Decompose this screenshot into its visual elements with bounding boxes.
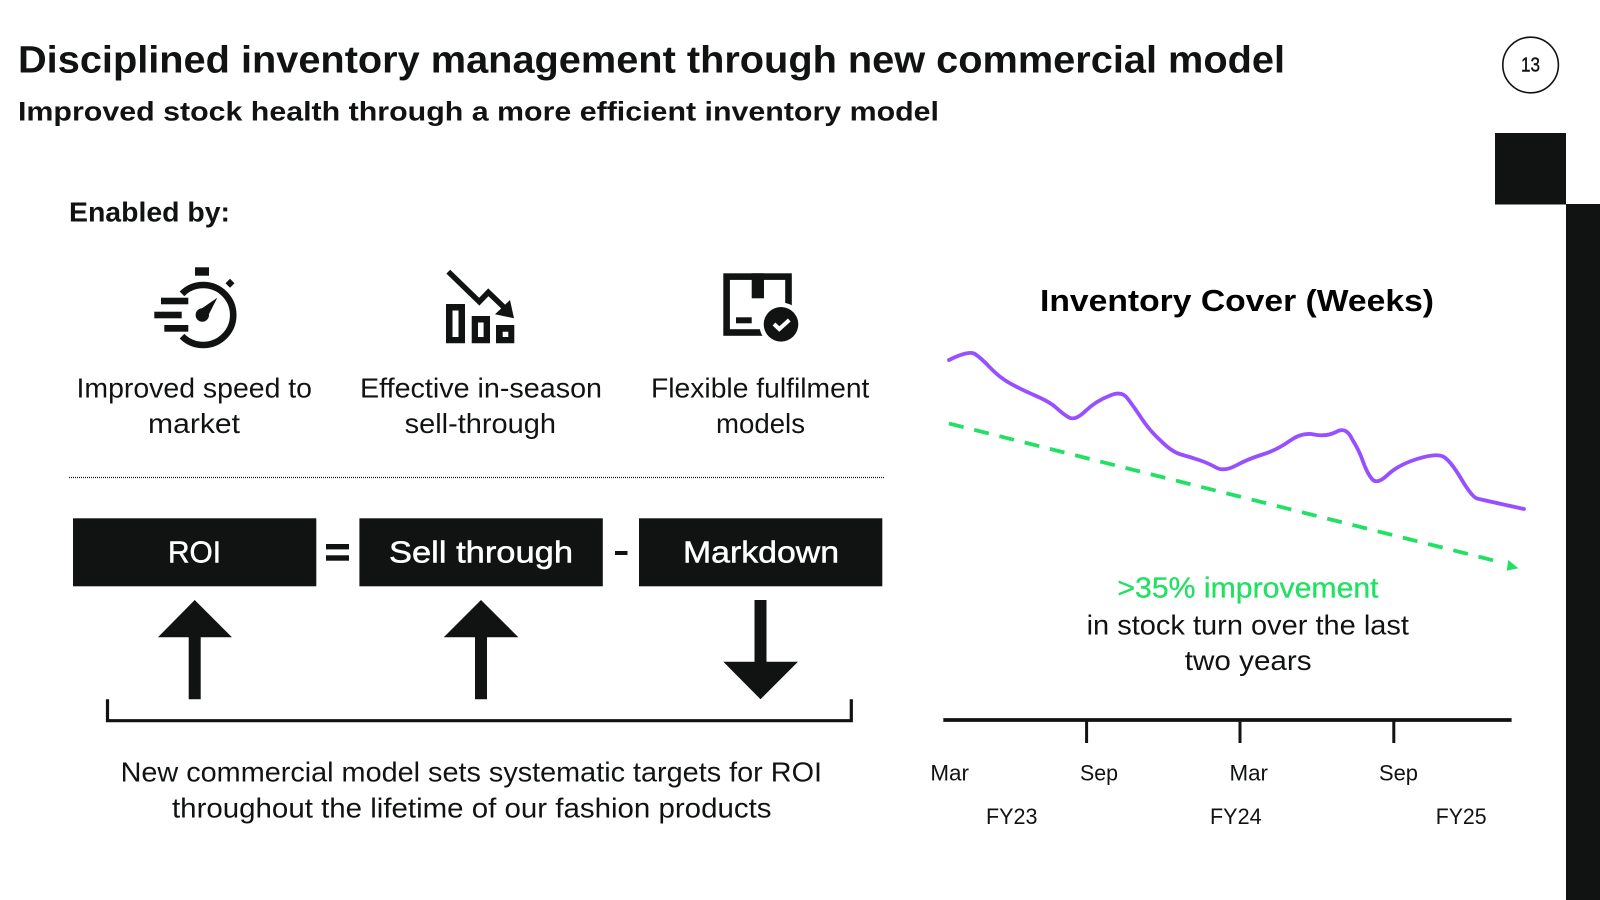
timeline axis (943, 720, 1512, 743)
equals sign (326, 544, 349, 561)
brand block: square and side bar (1495, 133, 1600, 900)
subtitle: Improved stock health through a more efficient inventory model (18, 97, 939, 127)
axis month labels: Sep (1080, 761, 1118, 786)
axis month labels: Mar (930, 761, 970, 786)
box: markdown (639, 518, 882, 586)
box: ROI (73, 518, 316, 586)
arrow: markdown down (723, 600, 798, 699)
page number badge (1503, 37, 1558, 93)
box: sell through: Sell through (389, 535, 573, 570)
axis month labels: Mar (1230, 761, 1269, 786)
axis fiscal year labels: FY24 (1210, 804, 1262, 829)
label: flexible fulfilment models (651, 372, 870, 439)
minus sign (615, 551, 628, 555)
caption: commercial model: New commercial model sets systematic targets for ROI (121, 757, 822, 788)
label: improved speed to market: market (148, 408, 240, 439)
caption: commercial model (121, 757, 822, 824)
arrow: ROI up (158, 600, 232, 699)
label: improved speed to market: Improved speed to (76, 372, 312, 403)
chart title: Inventory Cover (Weeks) (1040, 283, 1434, 318)
label: effective in-season sell-through (360, 372, 602, 439)
line chart: inventory cover (949, 353, 1524, 571)
icon: parcel with check (727, 273, 803, 346)
axis fiscal year labels: FY25 (1436, 804, 1487, 829)
label: improved speed to market (76, 372, 312, 439)
purple inventory line (949, 353, 1524, 509)
arrow: sell through up (444, 600, 518, 699)
axis month labels: Sep (1379, 761, 1418, 786)
label: flexible fulfilment models: models (716, 408, 805, 439)
icon: declining bars with arrow (446, 272, 514, 343)
callout: stock turn improvement (1087, 573, 1409, 676)
label: effective in-season sell-through: Effective in-season (360, 372, 602, 403)
page number badge: 13 (1521, 55, 1540, 77)
title: Disciplined inventory management through new commercial model (18, 40, 1285, 82)
callout: stock turn improvement: two years (1185, 645, 1312, 676)
caption: commercial model: throughout the lifetime of our fashion products (172, 793, 772, 824)
box: sell through (359, 518, 603, 586)
axis fiscal year labels: FY23 (986, 804, 1038, 829)
axis month labels (930, 761, 1418, 786)
label: effective in-season sell-through: sell-through (405, 408, 556, 439)
callout: stock turn improvement: >35% improvement (1117, 573, 1379, 605)
box: markdown: Markdown (683, 535, 839, 570)
icon: stopwatch speed (154, 267, 234, 345)
green dashed trend arrow (949, 424, 1518, 571)
callout: stock turn improvement: in stock turn over the last (1087, 609, 1409, 640)
bracket (108, 699, 851, 721)
box: ROI: ROI (168, 535, 221, 570)
axis fiscal year labels (986, 804, 1487, 829)
heading: enabled by: Enabled by: (69, 197, 230, 228)
label: flexible fulfilment models: Flexible fulfilment (651, 372, 870, 403)
